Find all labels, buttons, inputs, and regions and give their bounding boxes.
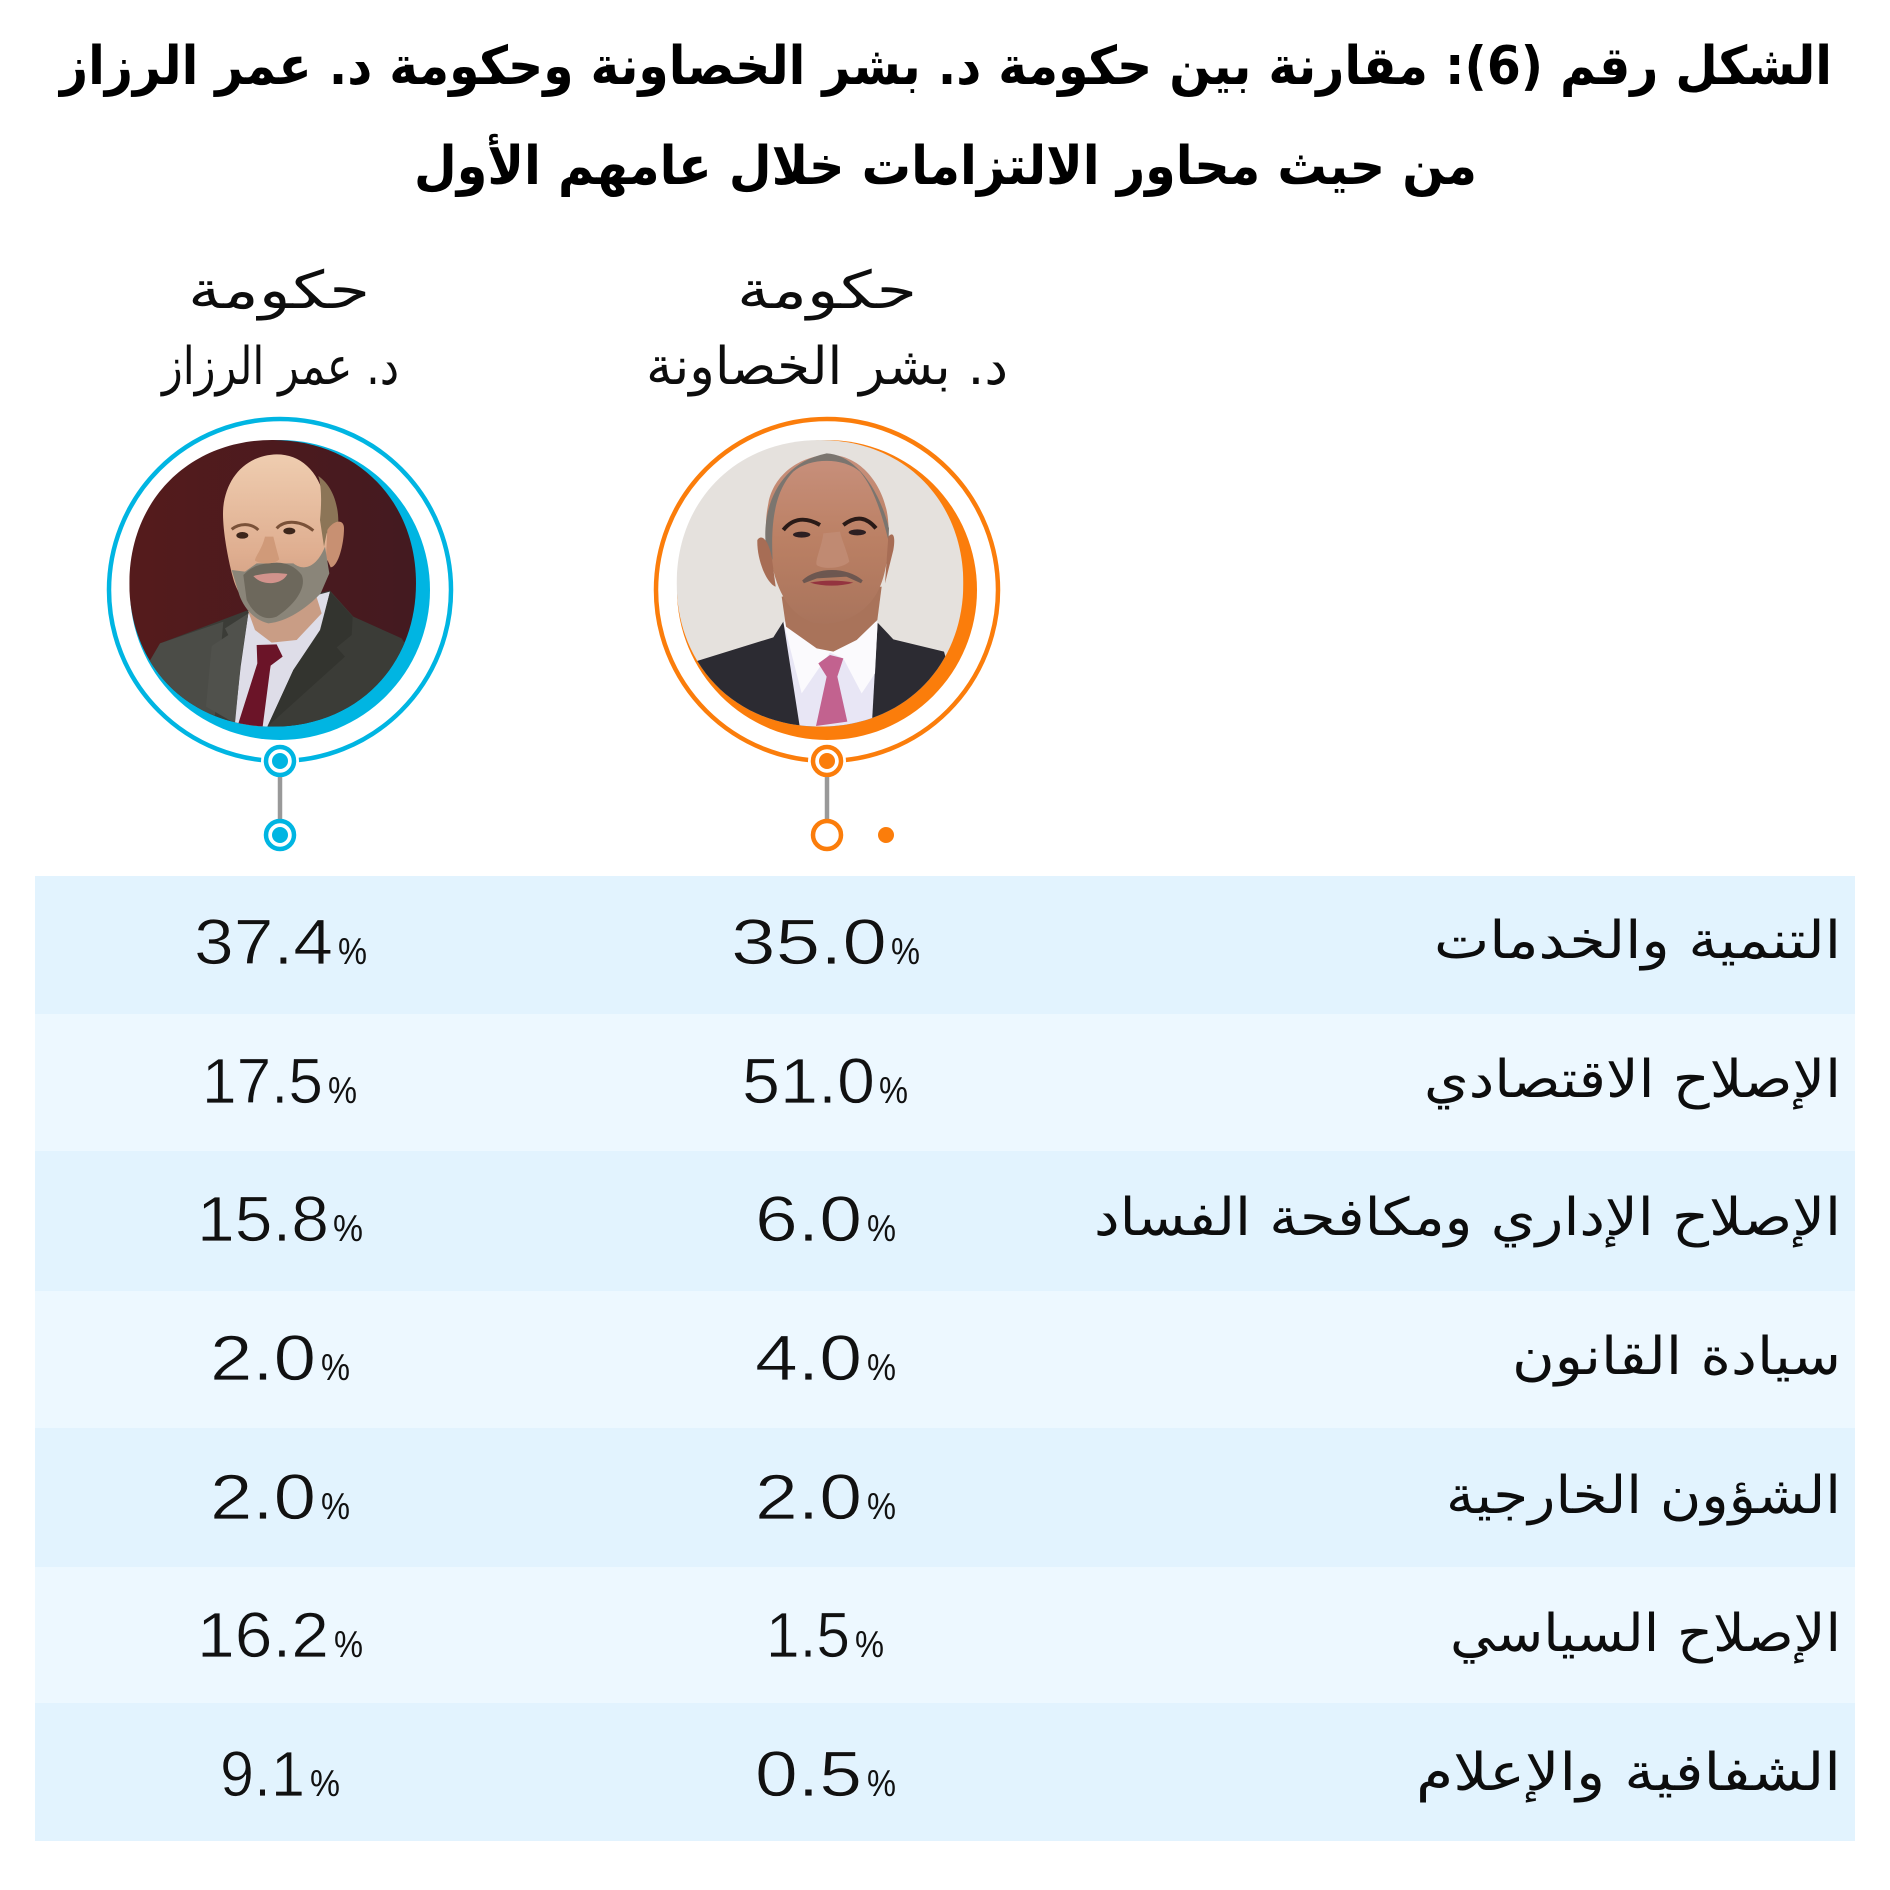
row: economic reform: 51.0 (742, 1045, 875, 1117)
row: political reform: 16.2 (197, 1599, 329, 1671)
row: political reform (35, 1567, 1855, 1703)
row: development and services: % (891, 931, 920, 972)
row: foreign affairs: الشؤون الخارجية (1446, 1466, 1841, 1526)
row: transparency and media: % (867, 1763, 896, 1804)
column heading: Bisher Khasawneh government (646, 261, 1008, 397)
comparison table (35, 876, 1855, 1841)
row: foreign affairs: % (867, 1486, 896, 1527)
row: rule of law: % (867, 1347, 896, 1388)
row: transparency and media: 0.5 (755, 1738, 862, 1810)
lower hollow node (813, 821, 841, 849)
row: rule of law (35, 1291, 1855, 1428)
row: administrative reform and anti-corruption (35, 1151, 1855, 1291)
title: الشكل رقم (6): مقارنة بين حكومة د. بشر الخصاونة وحكومة د. عمر الرزاز (57, 36, 1832, 97)
row: development and services: 35.0 (731, 906, 887, 978)
row: administrative reform and anti-corruption: 15.8 (197, 1183, 329, 1255)
portrait photo: Omar Razzaz (127, 437, 420, 733)
row: rule of law: % (321, 1347, 350, 1388)
row: foreign affairs (35, 1428, 1855, 1567)
row: transparency and media: 9.1 (220, 1738, 305, 1810)
column heading: Omar Razzaz government: حكومة (188, 261, 370, 321)
row: administrative reform and anti-corruption: الإصلاح الإداري ومكافحة الفساد (1094, 1188, 1841, 1248)
column heading: Omar Razzaz government (160, 261, 399, 397)
row: political reform: 1.5 (766, 1599, 850, 1671)
connector line (825, 777, 829, 820)
row: development and services (35, 876, 1855, 1014)
row: economic reform: 17.5 (202, 1045, 323, 1117)
portrait photo: Bisher Khasawneh (673, 437, 967, 733)
column heading: Bisher Khasawneh government: حكومة (737, 261, 917, 321)
portrait medallion: Omar Razzaz (109, 419, 451, 849)
row: administrative reform and anti-corruption: % (333, 1208, 363, 1249)
row: economic reform: الإصلاح الاقتصادي (1424, 1050, 1841, 1110)
row: development and services: % (338, 931, 367, 972)
row: transparency and media: الشفافية والإعلام (1416, 1743, 1841, 1803)
row: political reform: الإصلاح السياسي (1450, 1604, 1841, 1664)
lower node (266, 821, 294, 849)
row: political reform: % (334, 1624, 363, 1665)
title (57, 36, 1832, 197)
row: development and services: التنمية والخدمات (1434, 911, 1841, 971)
detached dot (878, 827, 894, 843)
row: foreign affairs: 2.0 (210, 1461, 316, 1533)
portrait medallion: Bisher Khasawneh (656, 419, 998, 849)
row: political reform: % (855, 1624, 884, 1665)
connector line (278, 777, 282, 820)
row: transparency and media (35, 1703, 1855, 1841)
title: من حيث محاور الالتزامات خلال عامهم الأول (414, 133, 1477, 197)
row: economic reform (35, 1014, 1855, 1151)
upper node (261, 742, 299, 780)
column heading: Bisher Khasawneh government: د. بشر الخصاونة (646, 337, 1008, 397)
row: administrative reform and anti-corruption: % (867, 1208, 896, 1249)
row: foreign affairs: 2.0 (755, 1461, 862, 1533)
row: transparency and media: % (310, 1763, 340, 1804)
row: economic reform: % (328, 1070, 357, 1111)
column heading: Omar Razzaz government: د. عمر الرزاز (160, 337, 399, 397)
row: rule of law: 4.0 (755, 1322, 862, 1394)
row: development and services: 37.4 (194, 906, 333, 978)
row: administrative reform and anti-corruption: 6.0 (755, 1183, 862, 1255)
row: rule of law: 2.0 (210, 1322, 316, 1394)
row: economic reform: % (879, 1070, 908, 1111)
upper node (808, 742, 846, 780)
row: foreign affairs: % (321, 1486, 350, 1527)
row: rule of law: سيادة القانون (1512, 1327, 1841, 1387)
